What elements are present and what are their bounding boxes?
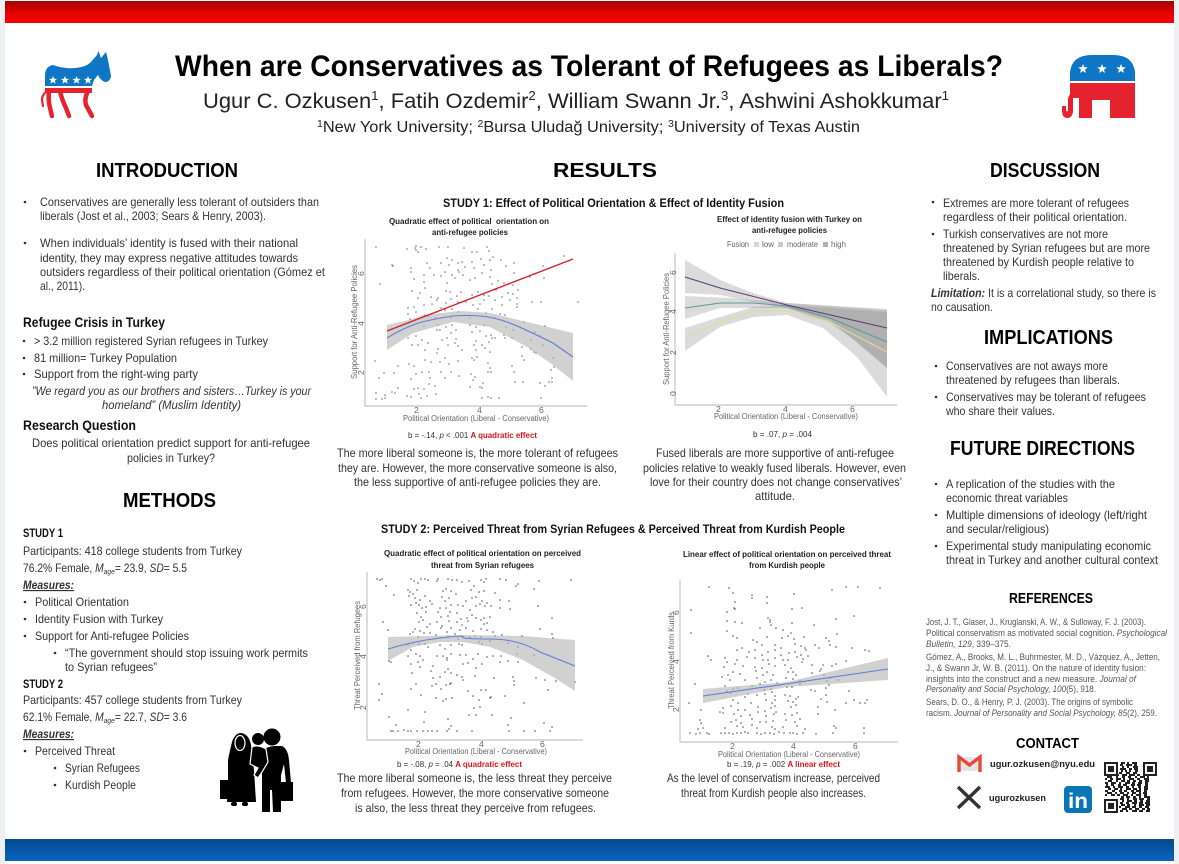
authors: 2 — [528, 88, 536, 103]
confidence band — [703, 658, 888, 703]
future directions bullets — [935, 478, 1159, 567]
panel: contact — [958, 736, 1157, 813]
caption: chart 2 — [643, 447, 906, 503]
study 1 methods: “The government should stop issuing work permits — [65, 647, 308, 660]
limitation note: Limitation: It is a correlational study, so there is — [931, 287, 1156, 300]
axis ticks and labels: Political Orientation (Liberal - Conservative) — [405, 746, 547, 756]
study 2 methods: Participants: 457 college students from Turkey — [23, 694, 242, 707]
research question text — [32, 437, 310, 465]
icon: democratic donkey — [42, 51, 111, 116]
future directions bullets: Experimental study manipulating economic — [946, 540, 1151, 553]
icon: linkedin — [1064, 786, 1092, 813]
refugee crisis bullets: Support from the right-wing party — [34, 368, 198, 381]
axis ticks and labels: 2 — [358, 705, 368, 710]
icon: republican elephant — [1062, 55, 1135, 118]
axis ticks and labels: 2 — [730, 741, 735, 751]
panel: introduction — [23, 160, 326, 465]
axis ticks and labels: Support for Anti-Refugee Policies — [661, 273, 671, 385]
reference list: Bulletin, 129, 339–375. — [926, 639, 1011, 649]
axis ticks and labels: Threat Perceived from Kurds — [666, 612, 676, 709]
study 1 methods: Identity Fusion with Turkey — [35, 613, 163, 626]
statistic: b = -.14, p < .001 A quadratic effect — [408, 430, 537, 440]
axis ticks and labels — [349, 265, 549, 423]
refugee crisis bullets — [23, 335, 268, 381]
future directions bullets: threat in Turkey and another cultural context — [946, 554, 1159, 567]
axis ticks and labels: 6 — [539, 405, 544, 415]
implications bullets: threatened by refugees than liberals. — [946, 374, 1120, 387]
axis ticks and labels: Political Orientation (Liberal - Conservative) — [403, 413, 549, 423]
study 1 methods: Participants: 418 college students from Turkey — [23, 545, 242, 558]
intro bullets — [24, 196, 326, 293]
affiliations: 1 — [317, 119, 323, 130]
study 1 methods: SD= 5.5 — [149, 562, 190, 575]
authors: 1 — [371, 88, 379, 103]
icon: linkedin: in — [1068, 790, 1088, 813]
axis ticks and labels: 2 — [356, 370, 366, 375]
discussion bullets: threatened by Syrian refugees but are more — [943, 242, 1150, 255]
caption: chart 3: from refugees. However, the more conservative someone — [341, 787, 609, 800]
intro bullets: al., 2011). — [40, 280, 85, 293]
red top banner — [5, 1, 1174, 23]
icon: QR code — [1104, 762, 1157, 813]
heading: methods: METHODS — [123, 490, 216, 512]
panel: methods — [23, 490, 308, 812]
handle: ugurozkusen — [989, 792, 1046, 803]
chart: threat from Kurdish people — [666, 549, 898, 769]
limitation note — [931, 287, 1156, 314]
authors: , William Swann Jr. — [536, 89, 721, 113]
panel: implications — [935, 327, 1146, 418]
axis ticks and labels: Political Orientation (Liberal - Conservative) — [714, 411, 858, 421]
study 1 methods — [23, 527, 308, 674]
study 1 methods: = 23.9, — [115, 562, 149, 575]
discussion bullets: liberals. — [943, 270, 980, 283]
confidence band — [387, 311, 573, 381]
axis ticks and labels: 6 — [668, 270, 678, 275]
research question text: policies in Turkey? — [127, 452, 216, 465]
axis ticks and labels: 4 — [479, 739, 484, 749]
heading: implications: IMPLICATIONS — [984, 327, 1113, 349]
caption: chart 2: attitude. — [755, 490, 795, 503]
study 2 methods: STUDY 2 — [23, 678, 63, 691]
caption: chart 2: love for their country does not change conservatives’ — [650, 476, 902, 489]
caption: chart 4: As the level of conservatism increase, perceived — [667, 772, 880, 785]
linear fit line — [703, 669, 888, 696]
affiliations: 3 — [668, 119, 674, 130]
study 1 methods: age — [104, 567, 115, 576]
implications bullets — [935, 360, 1146, 418]
reference list: Political conservatism as motivated social cognition. Psychological — [926, 628, 1168, 638]
axis ticks and labels: Support for Anti-Refugee Policies — [349, 265, 359, 379]
study 1 methods: to Syrian refugees” — [65, 661, 157, 674]
panel: future directions — [935, 438, 1159, 567]
chart: quadratic effect on anti-refugee policies: Quadratic effect of political orientation on — [389, 216, 549, 226]
axis ticks and labels: 4 — [477, 405, 482, 415]
study 1 methods: Political Orientation — [35, 596, 129, 609]
caption: chart 4 — [667, 772, 880, 800]
chart: threat from Syrian refugees: Quadratic effect of political orientation on perceived — [384, 548, 581, 558]
axis ticks and labels: 4 — [358, 654, 368, 659]
axis ticks and labels — [352, 601, 547, 756]
study 2 methods: Kurdish People — [65, 779, 136, 792]
heading: discussion: DISCUSSION — [990, 160, 1100, 182]
icon: X — [958, 787, 980, 808]
heading: references: REFERENCES — [1009, 591, 1093, 607]
reference list: Gómez, A., Brooks, M. L., Buhrmester, M. D., Vázquez, A., Jetten, — [926, 652, 1160, 662]
implications bullets: who share their values. — [945, 405, 1055, 418]
axis ticks and labels: 6 — [671, 610, 681, 615]
caption: chart 2: policies relative to weakly fused liberals. However, even — [643, 462, 906, 475]
caption: chart 1 — [337, 447, 618, 489]
confidence band — [388, 635, 575, 691]
caption: chart 3 — [337, 772, 612, 815]
discussion bullets: Turkish conservatives are not more — [943, 228, 1108, 241]
heading: study 2: STUDY 2: Perceived Threat from Syrian Refugees & Perceived Threat from Kurdish People — [381, 522, 845, 536]
statistic: b = -.08, p = .04 A quadratic effect — [397, 759, 522, 769]
intro bullets: identity, they may express negative attitudes towards — [40, 252, 298, 265]
axis ticks and labels — [666, 610, 860, 759]
heading: contact: CONTACT — [1016, 736, 1079, 752]
caption: chart 2: Fused liberals are more supportive of anti-refugee — [656, 447, 894, 460]
reference list: Jost, J. T., Glaser, J., Kruglanski, A. W., & Sulloway, F. J. (2003). — [926, 617, 1146, 627]
study 1 methods: Measures: — [23, 579, 74, 592]
study 2 methods: Perceived Threat — [35, 745, 116, 758]
study 1 methods: Support for Anti-refugee Policies — [35, 630, 189, 643]
authors: , Ashwini Ashokkumar — [728, 89, 942, 113]
axis ticks and labels: 4 — [356, 321, 366, 326]
caption: chart 1: they are. However, the more conservative someone is also, — [338, 462, 617, 475]
axis ticks and labels: 4 — [791, 741, 796, 751]
refugee crisis bullets: > 3.2 million registered Syrian refugees in Turkey — [34, 335, 268, 348]
blue bottom banner — [5, 839, 1174, 861]
line: high fusion — [685, 277, 887, 328]
axis ticks and labels: 6 — [540, 739, 545, 749]
caption: chart 3: The more liberal someone is, the less threat they perceive — [337, 772, 612, 785]
quadratic fit line — [388, 636, 575, 666]
legend: moderate — [787, 239, 818, 249]
affiliations: University of Texas Austin — [674, 119, 860, 136]
panel: references — [926, 591, 1168, 718]
chart: threat from Kurdish people: Linear effect of political orientation on perceived threat — [683, 549, 891, 559]
study 1 methods: 76.2% Female, M — [23, 562, 105, 575]
affiliations: Bursa Uludağ University; — [483, 119, 668, 136]
axis ticks and labels: 2 — [671, 707, 681, 712]
authors: Ugur C. Ozkusen — [203, 89, 368, 113]
future directions bullets: Multiple dimensions of ideology (left/right — [946, 509, 1148, 522]
axis ticks and labels: Political Orientation (Liberal - Conservative) — [718, 749, 860, 759]
heading: introduction: INTRODUCTION — [96, 160, 238, 182]
bands — [685, 260, 887, 397]
study 2 methods: Syrian Refugees — [65, 762, 140, 775]
axis ticks and labels: 4 — [671, 659, 681, 664]
study 2 methods: age — [104, 716, 115, 725]
linear fit line — [387, 259, 573, 331]
caption: chart 1: the less supportive of anti-refugee policies they are. — [354, 476, 601, 489]
chart: identity fusion effect: Effect of identity fusion with Turkey on — [717, 214, 862, 224]
heading: future directions: FUTURE DIRECTIONS — [950, 438, 1135, 460]
axis ticks and labels: 2 — [668, 350, 678, 355]
study 2 methods: 62.1% Female, M — [23, 711, 105, 724]
line: low fusion — [685, 311, 887, 352]
chart: identity fusion effect — [661, 214, 897, 439]
limitation note: no causation. — [931, 301, 993, 314]
subheading: refugee crisis: Refugee Crisis in Turkey — [23, 315, 165, 330]
statistic: b = .07, p = .004 — [753, 429, 812, 439]
caption: chart 4: threat from Kurdish people also increases. — [681, 787, 866, 800]
reference list — [926, 617, 1168, 718]
refugee crisis bullets: 81 million= Turkey Population — [34, 352, 177, 365]
line: moderate fusion — [685, 303, 887, 342]
research question text: Does political orientation predict support for anti-refugee — [32, 437, 310, 450]
panel: discussion — [931, 160, 1156, 314]
axis ticks and labels: 6 — [356, 271, 366, 276]
intro bullets: Conservatives are generally less tolerant of outsiders than — [40, 196, 319, 209]
heading: study 1: STUDY 1: Effect of Political Orientation & Effect of Identity Fusion — [443, 196, 784, 210]
chart: quadratic effect on anti-refugee policies: anti-refugee policies — [432, 227, 508, 237]
intro bullets: When individuals’ identity is fused with their national — [40, 237, 298, 250]
legend: high — [831, 239, 846, 249]
reference list: Sears, D. O., & Henry, P. J. (2003). The origins of symbolic — [926, 697, 1134, 707]
icon: refugee family — [220, 728, 293, 812]
axis ticks and labels: 2 — [416, 739, 421, 749]
legend — [727, 239, 846, 249]
study 2 methods — [23, 678, 242, 792]
authors: , Fatih Ozdemir — [379, 89, 528, 113]
chart: quadratic effect on anti-refugee policies — [349, 216, 587, 440]
icon: gmail — [959, 757, 980, 772]
future directions bullets: and secular/religious) — [946, 523, 1049, 536]
chart: threat from Kurdish people: from Kurdish people — [749, 560, 825, 570]
reference list: Personality and Social Psychology, 100(5), 918. — [926, 684, 1096, 694]
study 2 methods: Measures: — [23, 728, 74, 741]
discussion bullets — [932, 197, 1150, 283]
chart: identity fusion effect: anti-refugee policies — [752, 225, 827, 235]
study 2 methods: = 22.7, — [115, 711, 149, 724]
axis ticks and labels: 6 — [853, 741, 858, 751]
authors: 1 — [942, 88, 949, 103]
quote: ”We regard you as our brothers and sisters…Turkey is your — [32, 385, 312, 398]
chart: threat from Syrian refugees: threat from Syrian refugees — [431, 560, 534, 570]
axis ticks and labels: 2 — [716, 404, 721, 414]
discussion bullets: threatened by Kurdish people relative to — [943, 256, 1134, 269]
quote: homeland” (Muslim Identity) — [102, 399, 241, 412]
discussion bullets: Extremes are more tolerant of refugees — [943, 197, 1129, 210]
affiliations: New York University; — [323, 119, 477, 136]
axis ticks and labels: 4 — [783, 404, 788, 414]
reference list: racism. Journal of Personality and Social Psychology, 85(2), 259. — [926, 708, 1157, 718]
statistic: b = .19, p = .002 A linear effect — [727, 759, 840, 769]
caption: chart 3: is also, the less threat they perceive from refugees. — [355, 802, 596, 815]
title: When are Conservatives as Tolerant of Refugees as Liberals? — [175, 50, 1003, 83]
authors: 3 — [721, 88, 728, 103]
reference list: insights into the construct and a new measure. Journal of — [926, 674, 1137, 684]
future directions bullets: A replication of the studies with the — [946, 478, 1115, 491]
study 1 methods: STUDY 1 — [23, 527, 63, 540]
axis ticks and labels: Threat Perceived from Refugees — [352, 601, 362, 710]
axis ticks and labels: 6 — [850, 404, 855, 414]
discussion bullets: regardless of their political orientation. — [943, 211, 1127, 224]
heading: results: RESULTS — [553, 160, 657, 182]
intro bullets: liberals (Jost et al., 2003; Sears & Henry, 2003). — [40, 210, 266, 223]
study 2 methods: SD= 3.6 — [149, 711, 190, 724]
axis ticks and labels — [661, 270, 858, 421]
legend: low — [762, 239, 775, 249]
reference list: J., & Swann Jr, W. B. (2011). On the nature of identity fusion: — [926, 663, 1146, 673]
panel: results — [337, 160, 906, 815]
legend: Fusion — [727, 239, 749, 249]
future directions bullets: economic threat variables — [946, 492, 1068, 505]
quote — [32, 385, 312, 412]
implications bullets: Conservatives may be tolerant of refugees — [946, 391, 1146, 404]
axis ticks and labels: 4 — [668, 309, 678, 314]
axis ticks and labels: 0 — [668, 391, 678, 396]
intro bullets: outsiders regardless of their political orientation (Gómez et — [40, 266, 326, 279]
quadratic fit line — [387, 316, 573, 357]
email: ugur.ozkusen@nyu.edu — [990, 758, 1095, 769]
affiliations: 2 — [477, 119, 484, 130]
header — [42, 50, 1135, 136]
axis ticks and labels: 6 — [358, 604, 368, 609]
subheading: research question: Research Question — [23, 418, 136, 433]
caption: chart 1: The more liberal someone is, the more tolerant of refugees — [337, 447, 618, 460]
chart: threat from Syrian refugees — [352, 548, 583, 769]
implications bullets: Conservatives are not aways more — [946, 360, 1108, 373]
axis ticks and labels: 2 — [414, 405, 419, 415]
